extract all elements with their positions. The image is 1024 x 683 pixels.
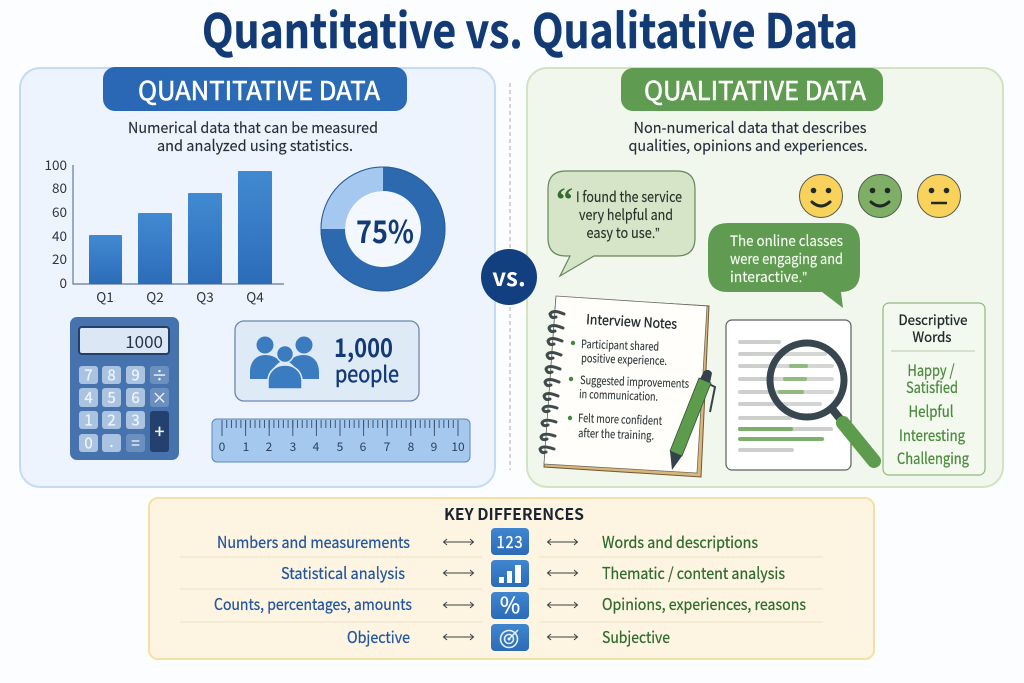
icon: happy yellow face	[800, 174, 842, 218]
bar chart: 80	[52, 177, 67, 197]
right column: qualitative traits: Opinions, experiences, reasons	[602, 591, 806, 615]
panel: descriptive words: Challenging	[897, 447, 969, 469]
icon: magnifying glass	[770, 343, 874, 461]
icon: calculator: .	[109, 431, 114, 452]
panel: quantitative data	[20, 67, 495, 487]
notebook: interview notes	[540, 296, 709, 477]
icon: calculator: 3	[131, 410, 140, 430]
icon: calculator: 1	[84, 410, 93, 430]
speech bubble: service quote: “	[556, 182, 573, 219]
icon: ruler: 7	[384, 438, 391, 455]
icon: ruler: 2	[266, 438, 273, 455]
bar chart: 60	[52, 201, 67, 221]
right column: qualitative traits: Words and descriptions	[602, 529, 758, 553]
heading: qualitative data: QUALITATIVE DATA	[644, 71, 866, 108]
notebook: interview notes: Felt more confident	[578, 410, 663, 429]
bar chart: Q4	[246, 286, 264, 306]
notebook: interview notes: in communication.	[579, 386, 658, 405]
left column: quantitative traits	[214, 529, 412, 648]
bar chart: 100	[45, 154, 67, 174]
icon: calculator: =	[131, 432, 140, 454]
icon: 123: 123	[496, 528, 524, 553]
description: qualitative: Non-numerical data that describes	[634, 117, 866, 138]
speech bubble: service quote	[548, 171, 695, 276]
icon: ruler: 3	[290, 438, 296, 455]
bar chart	[45, 154, 284, 306]
icon: happy green face	[858, 174, 902, 218]
speech bubble: service quote: easy to use.”	[586, 222, 660, 243]
notebook: interview notes: positive experience.	[581, 350, 667, 369]
icon: ruler	[212, 419, 470, 462]
icon: percent: %	[500, 588, 520, 620]
right column: qualitative traits: Thematic / content analysis	[602, 560, 785, 584]
icon: ruler: 5	[337, 438, 344, 455]
icon: calculator: 5	[107, 387, 116, 408]
bar chart: 40	[52, 225, 67, 245]
icon: ruler: 10	[451, 438, 465, 455]
bar chart: 20	[52, 248, 67, 268]
description: quantitative	[128, 117, 378, 156]
description: qualitative: qualities, opinions and experiences.	[628, 135, 868, 156]
icon: calculator: ×	[152, 387, 167, 408]
icon: ruler: 1	[243, 438, 249, 455]
panel: descriptive words: Helpful	[908, 400, 954, 422]
panel: key differences	[149, 498, 874, 659]
panel: descriptive words: Descriptive	[898, 310, 968, 330]
speech bubble: online classes quote: were engaging and	[730, 248, 843, 269]
icon: calculator: ÷	[152, 364, 167, 386]
badge: vs.: vs.	[492, 258, 526, 293]
panel: descriptive words: Happy /	[908, 359, 954, 381]
speech bubble: service quote: very helpful and	[579, 204, 673, 225]
icon: ruler: 4	[313, 438, 320, 455]
bar chart: Q1	[96, 286, 114, 306]
icon: calculator: 9	[131, 364, 140, 386]
donut chart: 75%: 75%	[356, 207, 414, 252]
speech bubble: service quote: I found the service	[576, 186, 682, 207]
heading: quantitative data	[103, 67, 407, 111]
panel: qualitative data	[527, 68, 1003, 487]
callout: 1,000 people: people	[335, 357, 399, 389]
icon: ruler: 8	[408, 438, 415, 455]
panel: descriptive words	[883, 303, 985, 475]
icon: green pen	[670, 370, 715, 470]
icon: calculator: 4	[84, 387, 93, 408]
icon: calculator: 7	[84, 364, 93, 386]
icon: calculator: 1000	[125, 328, 163, 353]
bar chart: Q2	[146, 286, 164, 306]
icon: calculator: 2	[107, 410, 116, 430]
speech bubble: online classes quote	[708, 223, 860, 308]
icon: calculator	[70, 317, 179, 460]
badge: vs.	[481, 249, 537, 305]
right column: qualitative traits: Subjective	[602, 624, 670, 648]
right column: qualitative traits	[602, 529, 806, 648]
description: qualitative	[628, 117, 868, 156]
icon: neutral face	[918, 174, 960, 218]
panel: descriptive words: Interesting	[899, 424, 965, 446]
document with magnifying glass	[726, 320, 874, 470]
heading: key differences: KEY DIFFERENCES	[444, 501, 584, 525]
description: quantitative: Numerical data that can be measured	[128, 117, 378, 138]
donut chart: 75%	[321, 167, 445, 291]
bar chart: Q3	[196, 286, 214, 306]
description: quantitative: and analyzed using statistics.	[157, 135, 353, 156]
icon: calculator: 8	[107, 364, 116, 386]
panel: descriptive words: Words	[912, 327, 952, 347]
icon: ruler: 9	[431, 438, 437, 455]
left column: quantitative traits: Numbers and measurements	[217, 529, 410, 553]
icon: target	[491, 624, 529, 651]
notebook: interview notes: Participant shared	[581, 336, 659, 355]
arrows	[444, 539, 578, 640]
icon: calculator: +	[154, 418, 164, 444]
icon: bar chart	[491, 560, 529, 587]
left column: quantitative traits: Statistical analysis	[281, 560, 405, 584]
icon: group of people	[250, 336, 319, 389]
left column: quantitative traits: Objective	[347, 624, 410, 648]
left column: quantitative traits: Counts, percentages, amounts	[214, 591, 412, 615]
icon: calculator: 0	[84, 432, 93, 454]
notebook: interview notes: Interview Notes	[586, 308, 678, 333]
icon: ruler: 0	[219, 438, 226, 455]
panel: descriptive words: Satisfied	[906, 376, 958, 398]
spiral binding	[540, 312, 564, 453]
callout: 1,000 people	[235, 321, 419, 401]
heading: quantitative data: QUANTITATIVE DATA	[138, 71, 380, 108]
speech bubble: online classes quote: The online classes	[730, 230, 843, 251]
icon: calculator: 6	[131, 387, 140, 408]
callout: 1,000 people: 1,000	[334, 328, 393, 365]
notebook: interview notes: Suggested improvements	[580, 372, 689, 392]
speech bubble: online classes quote: interactive.”	[730, 266, 807, 287]
notebook: interview notes: after the training.	[578, 425, 654, 444]
icon: percent	[491, 588, 529, 620]
bar chart: 0	[60, 272, 67, 292]
icon: ruler: 6	[360, 438, 367, 455]
